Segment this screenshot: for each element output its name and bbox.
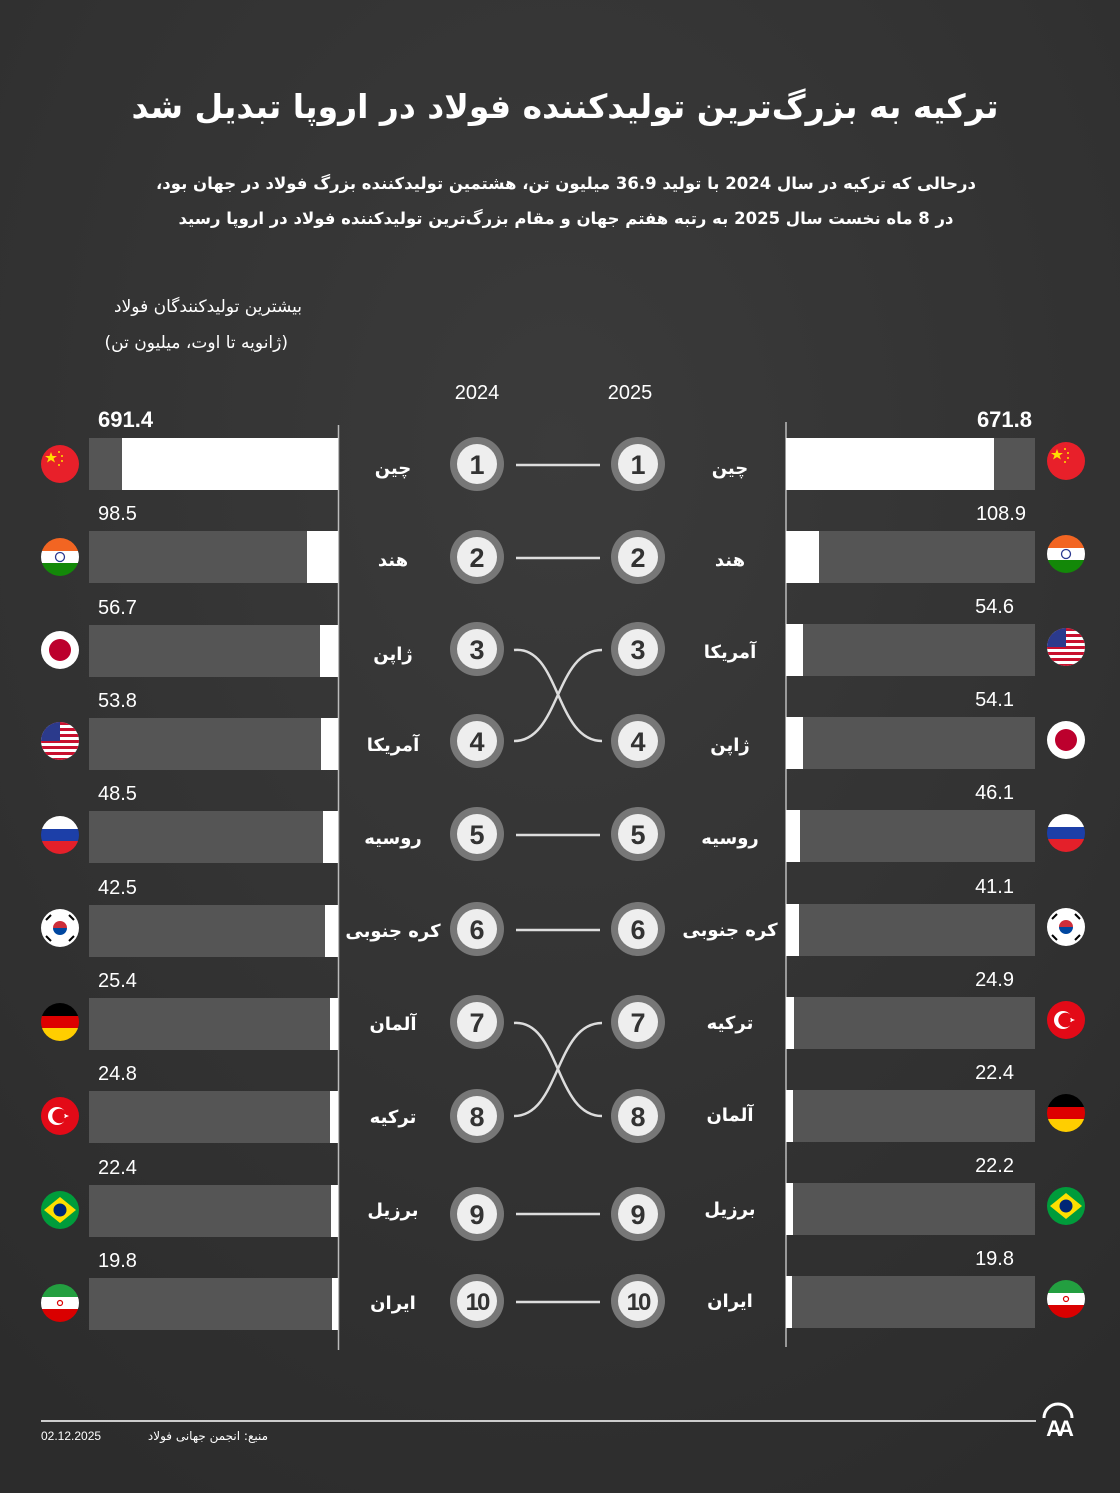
right values: 22.2 <box>975 1155 1014 1177</box>
country names 2025: آمریکا <box>704 640 757 663</box>
chart caption: (ژانویه تا اوت، میلیون تن) <box>105 333 288 353</box>
rank circles 2024: 2 <box>469 543 485 573</box>
logo: AA: AA <box>1046 1416 1074 1441</box>
right values: 108.9 <box>976 503 1026 525</box>
country names 2024: کره جنوبی <box>345 921 441 942</box>
country names 2025: ژاپن <box>710 735 750 756</box>
left chart: 2024 <box>89 438 338 1330</box>
right values <box>975 407 1032 1270</box>
subtitle: در 8 ماه نخست سال 2025 به رتبه هفتم جهان و مقام بزرگ‌ترین تولیدکننده فولاد در اروپا رسید <box>179 209 953 229</box>
subtitle: درحالی که ترکیه در سال 2024 با تولید 36.9 میلیون تن، هشتمین تولیدکننده بزرگ فولاد در جهان بود، <box>156 174 976 194</box>
rank circles 2024: 5 <box>469 820 485 850</box>
rank circles 2025: 3 <box>630 635 646 665</box>
country names 2025: ایران <box>707 1291 753 1312</box>
rank circles 2024: 10 <box>466 1289 490 1316</box>
rank circles 2024: 7 <box>469 1008 485 1038</box>
year labels <box>455 382 652 404</box>
left values: 48.5 <box>98 783 137 805</box>
title: ترکیه به بزرگ‌ترین تولیدکننده فولاد در اروپا تبدیل شد <box>132 87 998 127</box>
rank circles 2025: 10 <box>627 1289 651 1316</box>
left values: 56.7 <box>98 597 137 619</box>
country names 2025: آلمان <box>706 1103 754 1126</box>
right values: 19.8 <box>975 1248 1014 1270</box>
country names 2024: ترکیه <box>370 1107 416 1128</box>
axis lines <box>338 425 340 1350</box>
left values: 53.8 <box>98 690 137 712</box>
rank circles 2025: 8 <box>630 1102 646 1132</box>
rank circles 2024: 9 <box>469 1200 485 1230</box>
rank circles 2025: 4 <box>630 727 646 757</box>
footer source: منبع: انجمن جهانی فولاد <box>148 1429 268 1444</box>
country names 2024: آمریکا <box>367 733 420 756</box>
right values: 46.1 <box>975 782 1014 804</box>
country names 2024: هند <box>378 550 408 571</box>
rank circles 2025 <box>611 437 665 1328</box>
right values: 22.4 <box>975 1062 1014 1084</box>
country names 2025: روسیه <box>701 828 759 849</box>
left values: 691.4 <box>98 407 154 432</box>
rank circles 2025: 5 <box>630 820 646 850</box>
country names 2024: ژاپن <box>373 644 413 665</box>
rank circles 2025: 6 <box>630 915 646 945</box>
country names 2025: هند <box>715 550 745 571</box>
left values <box>98 407 154 1272</box>
rank circles 2024: 1 <box>469 450 485 480</box>
country names 2025: ترکیه <box>707 1013 753 1034</box>
country names 2025 <box>682 458 778 1312</box>
left values: 24.8 <box>98 1063 137 1085</box>
right flags <box>1047 442 1085 1318</box>
right values: 41.1 <box>975 876 1014 898</box>
right values: 54.1 <box>975 689 1014 711</box>
left values: 25.4 <box>98 970 137 992</box>
country names 2024: چین <box>375 458 411 479</box>
rank circles 2025: 1 <box>630 450 646 480</box>
rank circles 2024 <box>450 437 504 1328</box>
logo: AA <box>1044 1404 1074 1441</box>
right values: 671.8 <box>977 407 1032 432</box>
right chart: 2025 <box>786 438 1035 1328</box>
country names 2024: آلمان <box>369 1012 417 1035</box>
rank circles 2024: 6 <box>469 915 485 945</box>
connector lines <box>514 465 602 1302</box>
rank circles 2025: 2 <box>630 543 646 573</box>
rank circles 2024: 4 <box>469 727 485 757</box>
country names 2024: ایران <box>370 1293 416 1314</box>
right values: 24.9 <box>975 969 1014 991</box>
left flags <box>41 445 79 1322</box>
country names 2024 <box>345 458 441 1314</box>
footer rule <box>41 1420 1036 1422</box>
country names 2024: روسیه <box>364 828 422 849</box>
country names 2025: برزیل <box>704 1199 756 1220</box>
country names 2025: کره جنوبی <box>682 920 778 941</box>
rank circles 2025: 7 <box>630 1008 646 1038</box>
rank circles 2024: 3 <box>469 635 485 665</box>
left values: 22.4 <box>98 1157 137 1179</box>
year labels: 2024 <box>455 382 499 404</box>
rank circles 2025: 9 <box>630 1200 646 1230</box>
chart caption <box>105 296 302 353</box>
chart caption: بیشترین تولیدکنندگان فولاد <box>114 296 302 317</box>
subtitle <box>156 174 976 229</box>
left values: 42.5 <box>98 877 137 899</box>
left values: 98.5 <box>98 503 137 525</box>
country names 2025: چین <box>712 458 748 479</box>
rank circles 2024: 8 <box>469 1102 485 1132</box>
right values: 54.6 <box>975 596 1014 618</box>
footer date: 02.12.2025 <box>41 1429 101 1443</box>
year labels: 2025 <box>608 382 652 404</box>
left values: 19.8 <box>98 1250 137 1272</box>
country names 2024: برزیل <box>367 1200 419 1221</box>
